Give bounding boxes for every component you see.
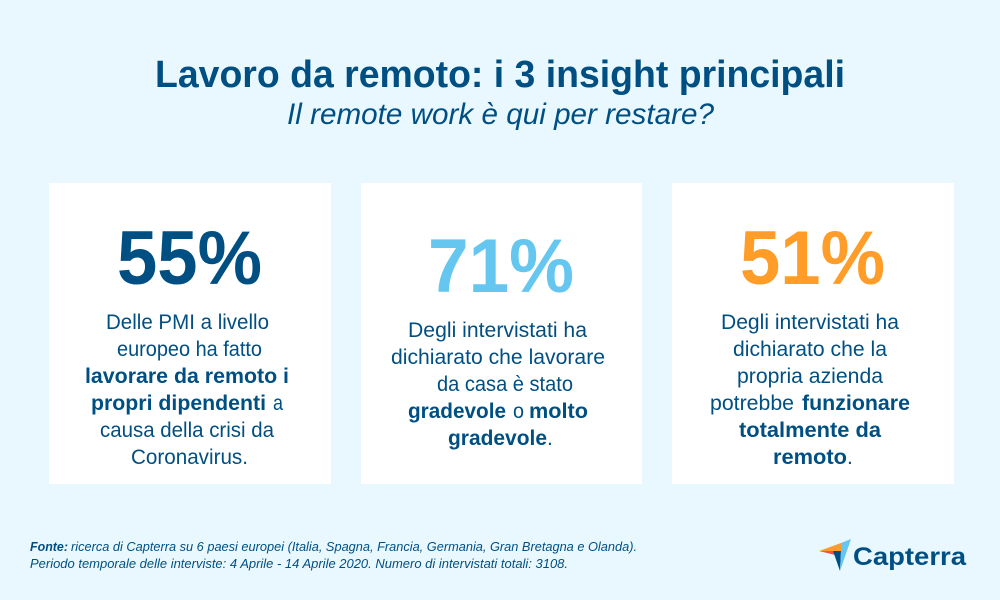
source note: Periodo temporale delle interviste: 4 Aprile - 14 Aprile 2020. Numero di intervistati totali: 3108.: [30, 557, 568, 571]
description text: [391, 319, 605, 450]
description text: a: [273, 392, 283, 415]
description text: Delle PMI a livello: [106, 311, 269, 334]
description text: propria azienda: [737, 365, 883, 388]
description text: dichiarato che la: [733, 338, 887, 361]
description text: o: [513, 400, 524, 423]
description text: Degli intervistati ha: [721, 311, 899, 334]
description text: remoto: [773, 446, 847, 469]
panel: 71% statistic: [361, 183, 642, 484]
panel: 55% statistic: [49, 183, 331, 484]
source note: Fonte:: [30, 540, 68, 554]
description text: molto: [529, 400, 588, 423]
panel: 51% statistic: [672, 183, 954, 484]
big number 71%: 71%: [428, 224, 574, 309]
description text: Coronavirus.: [131, 446, 248, 469]
description text: lavorare da remoto i: [85, 365, 289, 388]
big number 51%: 51%: [740, 216, 885, 301]
source note: ricerca di Capterra su 6 paesi europei (Italia, Spagna, Francia, Germania, Gran Bretagna e Olanda).: [71, 540, 637, 554]
description text: da casa è stato: [437, 373, 573, 396]
subtitle: Il remote work è qui per restare?: [287, 98, 714, 131]
big number 55%: 55%: [117, 216, 262, 301]
source note: [30, 540, 637, 571]
description text: [710, 311, 910, 469]
Capterra wordmark: Capterra: [853, 543, 967, 571]
description text: europeo ha fatto: [117, 338, 262, 361]
description text: dichiarato che lavorare: [391, 346, 605, 369]
description text: .: [547, 427, 553, 450]
title: Lavoro da remoto: i 3 insight principali: [155, 54, 845, 96]
description text: Degli intervistati ha: [408, 319, 587, 342]
description text: .: [847, 446, 853, 469]
description text: potrebbe: [710, 392, 794, 415]
description text: gradevole: [408, 400, 506, 423]
description text: propri dipendenti: [91, 392, 266, 415]
description text: gradevole: [448, 427, 547, 450]
description text: causa della crisi da: [100, 419, 274, 442]
description text: [85, 311, 289, 469]
description text: funzionare: [802, 392, 910, 415]
icon: Capterra logo mark: [819, 539, 851, 571]
description text: totalmente da: [739, 419, 881, 442]
